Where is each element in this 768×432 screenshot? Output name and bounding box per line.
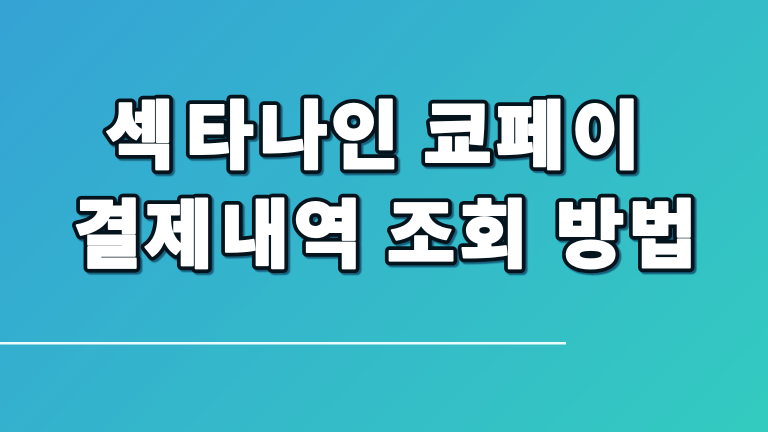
title line 1: 섹타나인 쿄페이 xyxy=(106,95,640,178)
title line 2: 결제내역 조회 방법 xyxy=(73,194,697,277)
white divider line xyxy=(0,342,566,344)
title line 2: 결제내역 조회 방법 xyxy=(73,194,697,277)
title line 1: 섹타나인 쿄페이 xyxy=(106,95,640,178)
